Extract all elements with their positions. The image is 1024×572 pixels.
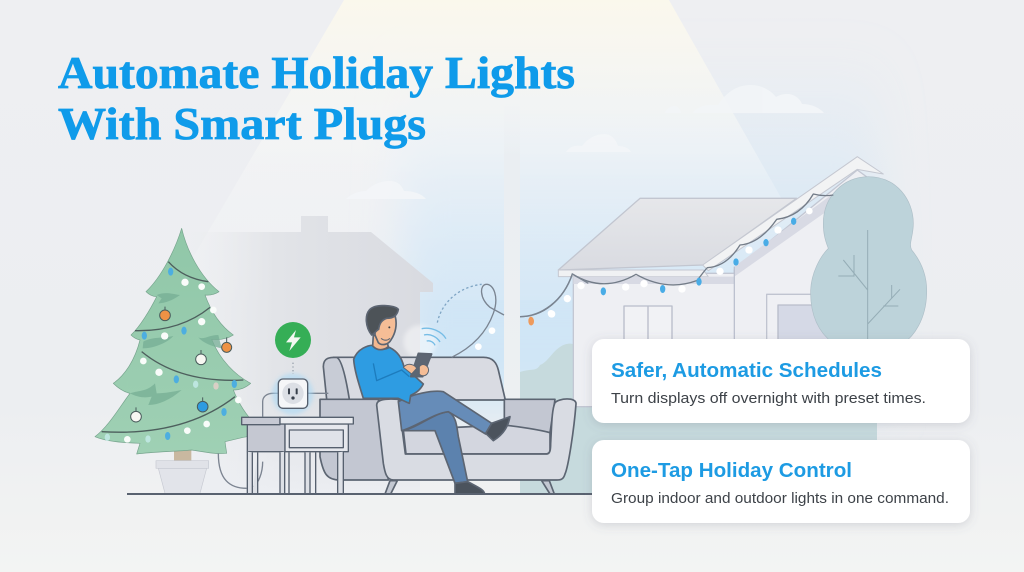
cord loop bbox=[452, 274, 588, 357]
front of sofa bbox=[377, 399, 576, 480]
card: control bbox=[592, 440, 970, 523]
window pillar bbox=[504, 100, 520, 400]
window left bbox=[624, 306, 672, 407]
icon: lightning badge bbox=[275, 322, 311, 358]
smart plug bbox=[278, 379, 308, 408]
main roof bbox=[558, 198, 797, 270]
sofa inner right bbox=[504, 399, 555, 433]
phone and hand bbox=[403, 353, 432, 377]
outdoor house bbox=[520, 157, 927, 408]
pot bbox=[156, 461, 209, 493]
roof fascia bbox=[558, 270, 708, 277]
cord bulbs bbox=[475, 282, 584, 350]
title: Automate Holiday Lights bbox=[58, 47, 575, 98]
socket glow bbox=[272, 373, 313, 415]
colored tree bulbs bbox=[105, 268, 237, 443]
title bbox=[58, 47, 575, 149]
person lower leg bbox=[403, 412, 468, 483]
sofa inner left bbox=[320, 399, 388, 480]
outdoor light string bbox=[520, 194, 833, 317]
eave shadow bbox=[573, 193, 833, 284]
side table bbox=[242, 417, 353, 494]
sofa left back cushion bbox=[323, 357, 349, 399]
icon: wifi bbox=[422, 328, 446, 345]
power cords bbox=[218, 393, 328, 488]
orange bulb bbox=[528, 317, 534, 325]
background house silhouette bbox=[190, 216, 433, 494]
person torso bbox=[354, 345, 423, 403]
clouds bbox=[346, 85, 824, 199]
card: control: Group indoor and outdoor lights in one command. bbox=[611, 490, 949, 507]
connector dots bbox=[291, 363, 295, 374]
person shoes bbox=[455, 417, 510, 494]
teal garden band bbox=[520, 344, 877, 494]
house walls bbox=[573, 170, 880, 407]
wifi and cord bbox=[422, 274, 588, 357]
window sky bbox=[400, 50, 880, 410]
card: schedules: Turn displays off overnight with preset times. bbox=[611, 390, 926, 407]
ground line bbox=[127, 493, 592, 495]
person arm line bbox=[373, 363, 409, 381]
white bulbs bbox=[548, 208, 813, 318]
gable trim bbox=[703, 157, 883, 271]
person glow bbox=[403, 325, 437, 358]
wall divider bbox=[732, 267, 736, 407]
light beam bbox=[168, 0, 839, 300]
person upper leg bbox=[398, 391, 492, 434]
tree shading bbox=[130, 293, 222, 405]
window right bbox=[767, 294, 835, 408]
seat cushion bbox=[403, 425, 550, 454]
orange and blue bulbs bbox=[529, 218, 796, 325]
title: With Smart Plugs bbox=[58, 98, 426, 149]
sofa legs bbox=[385, 481, 554, 494]
card: schedules bbox=[592, 339, 970, 423]
white tree bulbs bbox=[124, 279, 242, 443]
card: schedules: Safer, Automatic Schedules bbox=[611, 360, 882, 382]
front tree bbox=[811, 177, 927, 343]
sofa and person bbox=[320, 306, 576, 494]
card: control: One-Tap Holiday Control bbox=[611, 460, 852, 482]
christmas tree bbox=[95, 228, 260, 454]
sofa back bbox=[333, 357, 505, 400]
tree trunk bbox=[174, 443, 191, 462]
tree garlands bbox=[102, 262, 243, 432]
person neck and face bbox=[366, 306, 398, 350]
dashed signal line bbox=[437, 284, 482, 323]
ornaments bbox=[131, 307, 232, 422]
tree and side table bbox=[95, 228, 353, 494]
